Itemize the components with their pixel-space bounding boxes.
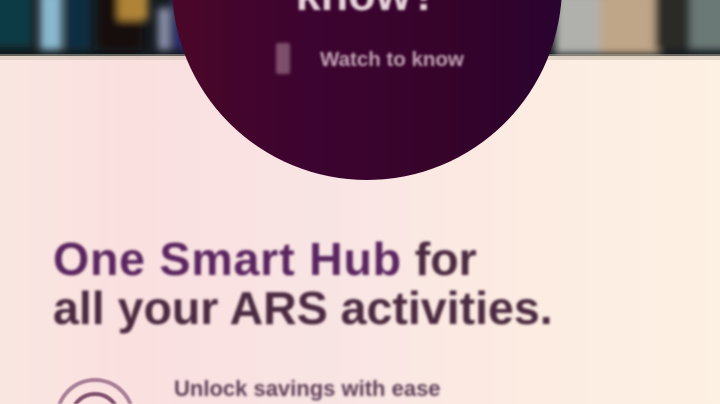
icon: phone — [276, 43, 290, 74]
main heading: all your ARS activities. — [53, 282, 553, 334]
circle caption: Watch to know — [320, 48, 464, 71]
main heading — [52, 233, 553, 336]
main heading: One Smart Hub for — [53, 233, 477, 285]
body text: Unlock savings with ease — [174, 376, 441, 401]
dark purple circle — [172, 0, 562, 180]
photo strip — [0, 0, 720, 60]
icon: hub emblem — [57, 377, 133, 404]
